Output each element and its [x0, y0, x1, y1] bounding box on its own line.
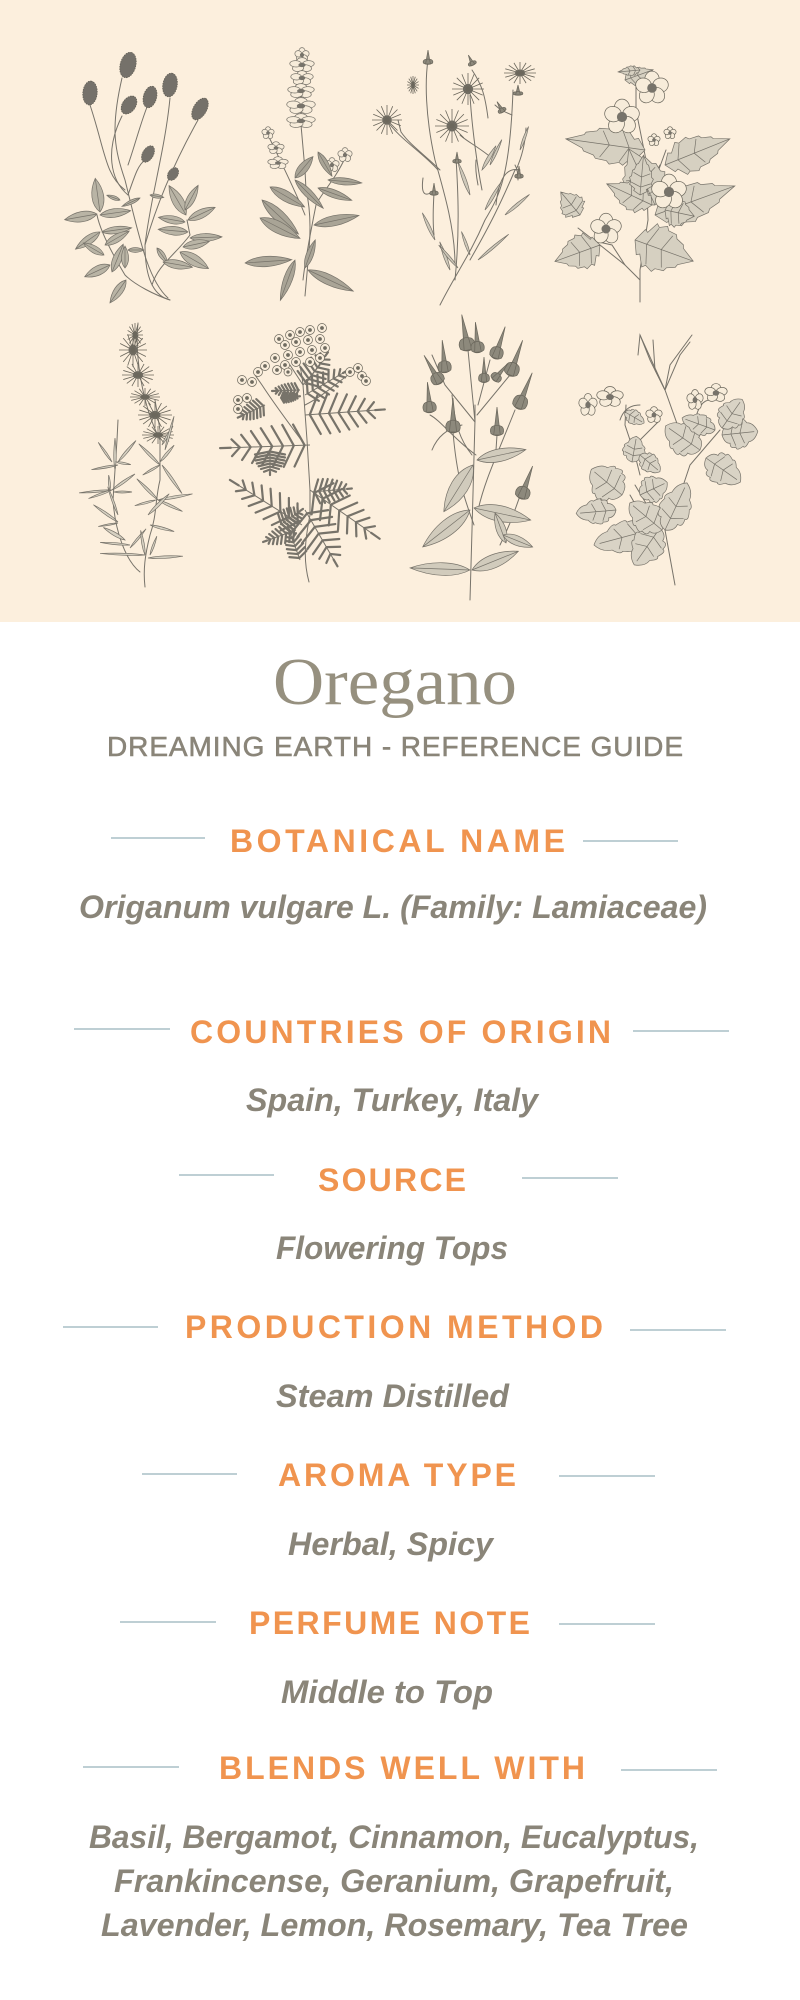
heading: perfume note: PERFUME NOTE	[249, 1605, 530, 1641]
section: perfume note	[120, 1605, 655, 1710]
heading rule left	[179, 1174, 274, 1176]
section: countries of origin	[74, 1014, 729, 1118]
section: blends well with	[83, 1750, 717, 1943]
heading: countries of origin: COUNTRIES OF ORIGIN	[190, 1014, 611, 1050]
heading rule left	[83, 1766, 179, 1768]
hero panel: botanical illustrations	[0, 0, 800, 622]
section: production method	[63, 1309, 726, 1414]
plant: tansy	[219, 324, 391, 582]
heading rule left	[142, 1473, 237, 1475]
heading: botanical name: BOTANICAL NAME	[230, 823, 565, 859]
heading: aroma type: AROMA TYPE	[278, 1457, 516, 1493]
heading: blends well with: BLENDS WELL WITH	[219, 1750, 585, 1786]
heading rule right	[559, 1623, 655, 1625]
plant: celandine	[575, 335, 759, 585]
section: aroma type	[142, 1457, 655, 1562]
heading: production method: PRODUCTION METHOD	[185, 1309, 603, 1345]
plant: mallow	[549, 61, 742, 302]
value: source: Flowering Tops	[276, 1230, 508, 1266]
value: blends list	[89, 1819, 699, 1943]
section: source	[179, 1162, 618, 1266]
plant: burnet with oval heads	[64, 50, 222, 305]
plant: hyssop	[79, 323, 193, 587]
value: blends list: Lavender, Lemon, Rosemary, Tea Tree	[101, 1907, 688, 1943]
heading rule right	[621, 1769, 717, 1771]
section: botanical name	[79, 823, 707, 925]
subtitle: DREAMING EARTH - REFERENCE GUIDE	[107, 731, 683, 762]
heading rule left	[74, 1028, 170, 1030]
heading rule right	[633, 1030, 729, 1032]
title: Oregano	[273, 645, 517, 719]
value: botanical name: Origanum vulgare L. (Family: Lamiaceae)	[79, 889, 707, 925]
value: aroma type: Herbal, Spicy	[288, 1526, 495, 1562]
heading: source: SOURCE	[318, 1162, 466, 1198]
heading rule right	[583, 840, 678, 842]
plant: sage	[245, 48, 362, 302]
heading rule left	[63, 1326, 158, 1328]
value: countries: Spain, Turkey, Italy	[246, 1082, 540, 1118]
plant: cornflower	[372, 50, 536, 305]
value: blends list: Basil, Bergamot, Cinnamon, Eucalyptus,	[89, 1819, 699, 1855]
value: blends list: Frankincense, Geranium, Grapefruit,	[114, 1863, 674, 1899]
heading rule right	[522, 1177, 618, 1179]
heading rule left	[111, 837, 205, 839]
plant: vervain	[410, 313, 539, 600]
heading rule right	[630, 1329, 726, 1331]
value: perfume note: Middle to Top	[281, 1674, 493, 1710]
heading rule right	[559, 1475, 655, 1477]
heading rule left	[120, 1621, 216, 1623]
value: production method: Steam Distilled	[276, 1378, 510, 1414]
